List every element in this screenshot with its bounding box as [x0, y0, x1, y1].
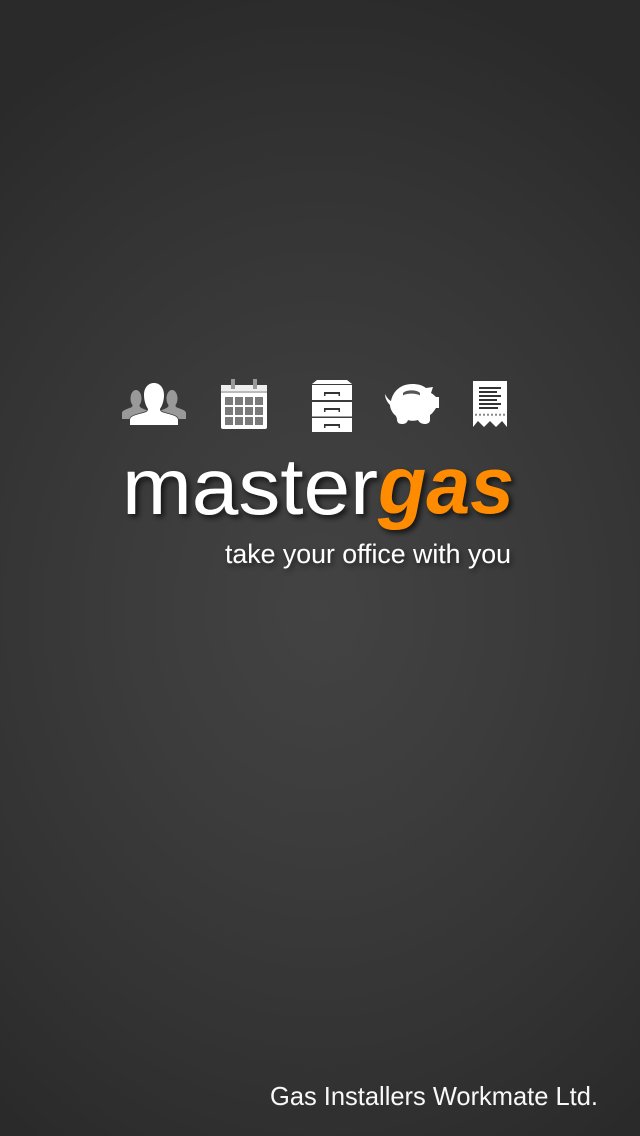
footer company name: Gas Installers Workmate Ltd. — [270, 1081, 598, 1111]
logo: mastergas — [122, 440, 514, 531]
icon: calendar — [221, 379, 267, 429]
logo: mastergas: master — [122, 442, 378, 531]
logo: mastergas: gas — [377, 440, 514, 531]
tagline: take your office with you — [225, 539, 511, 569]
icon: filing cabinet — [312, 380, 352, 432]
icon: contacts — [122, 383, 186, 425]
icon: piggy bank — [385, 384, 439, 424]
icon: receipt — [473, 381, 507, 427]
